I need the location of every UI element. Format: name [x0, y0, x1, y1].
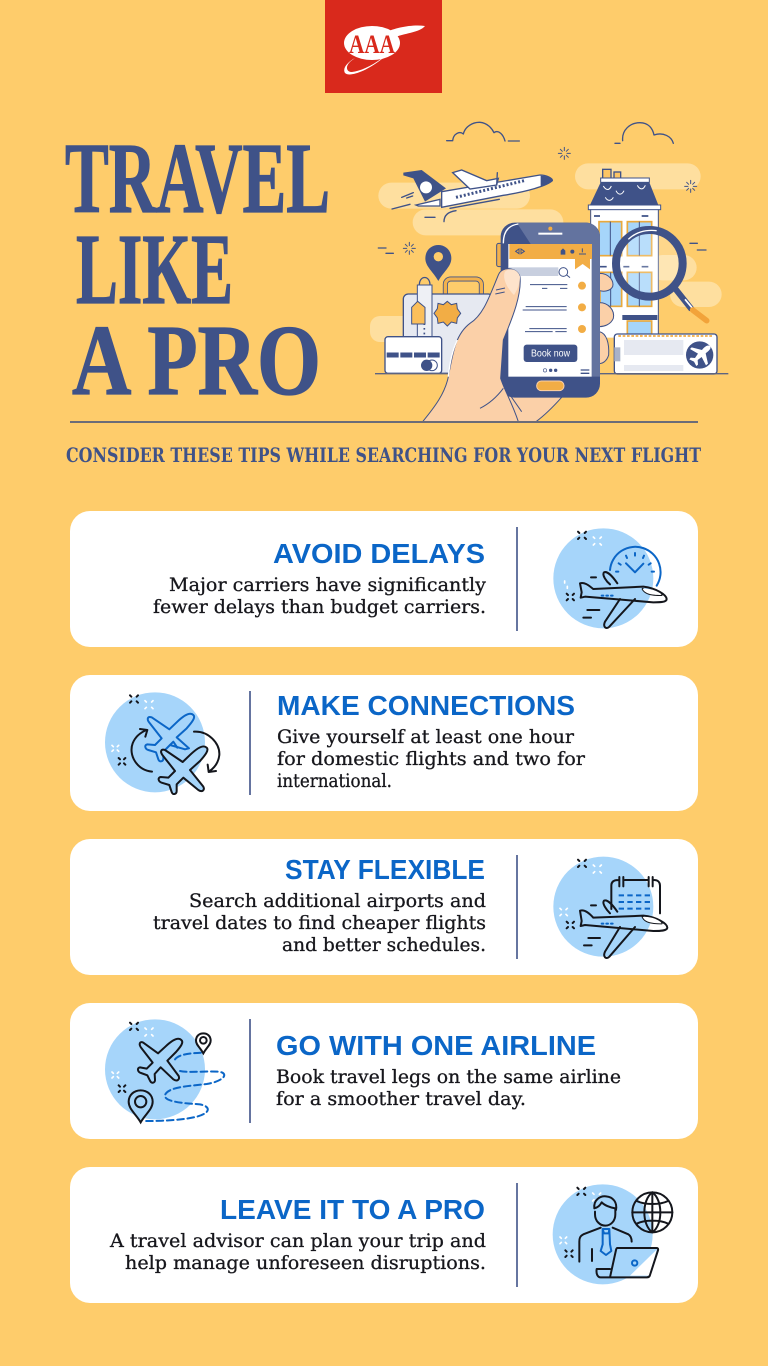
- text: stay flexible: travel dates to find cheaper flights: [153, 912, 486, 934]
- text: leave it to a pro: A travel advisor can plan your trip and: [109, 1230, 486, 1252]
- hotel building: [588, 169, 661, 338]
- airplane: [392, 170, 552, 222]
- icon: plane and calendar: [553, 857, 667, 958]
- AAA logo: AAA: [349, 30, 395, 59]
- text: avoid delays: Major carriers have significantly: [169, 574, 486, 596]
- text: avoid delays: fewer delays than budget carriers.: [153, 596, 486, 618]
- text: make connections: for domestic flights and two for: [277, 748, 586, 770]
- magnifying glass: [616, 230, 707, 321]
- title: A PRO: [72, 304, 321, 416]
- hand behind phone: [503, 273, 614, 422]
- text: make connections: [277, 726, 586, 792]
- hero illustration: phone booking scene: [370, 122, 728, 422]
- location pin: [425, 245, 451, 281]
- icon: two planes with arrows: [105, 692, 219, 794]
- heading: leave it to a pro: LEAVE IT TO A PRO: [220, 1194, 485, 1225]
- smartphone: [497, 223, 600, 398]
- icon: plane and clock: [553, 528, 667, 628]
- header divider line: [70, 421, 698, 423]
- text: make connections: international.: [277, 770, 392, 792]
- pale clouds: [370, 163, 722, 342]
- text: go with one airline: for a smoother travel day.: [276, 1088, 526, 1110]
- text: leave it to a pro: help manage unforeseen disruptions.: [125, 1252, 486, 1274]
- panel: leave it to a pro: [70, 1167, 698, 1303]
- AAA logo: [325, 0, 442, 93]
- text: stay flexible: and better schedules.: [282, 934, 486, 956]
- text: make connections: Give yourself at least one hour: [277, 726, 575, 748]
- title: [65, 122, 330, 416]
- text: go with one airline: [276, 1066, 621, 1110]
- text: go with one airline: Book travel legs on the same airline: [276, 1066, 621, 1088]
- panel: go with one airline: [70, 1003, 698, 1139]
- boarding pass: [614, 334, 717, 374]
- ground line: [375, 372, 728, 376]
- title: TRAVEL: [65, 122, 330, 234]
- credit card: [385, 337, 442, 373]
- icon: travel advisor with globe and laptop: [553, 1184, 672, 1284]
- panel: stay flexible: [70, 839, 698, 975]
- cloud outlines and sparkles: [378, 122, 706, 254]
- heading: avoid delays: AVOID DELAYS: [273, 538, 485, 569]
- text: stay flexible: Search additional airports and: [189, 890, 486, 912]
- text: leave it to a pro: [109, 1230, 486, 1274]
- suitcase: [403, 277, 493, 373]
- smartphone: Book now: [531, 348, 571, 359]
- heading: go with one airline: GO WITH ONE AIRLINE: [276, 1030, 596, 1061]
- panel: avoid delays: [70, 511, 698, 647]
- heading: make connections: MAKE CONNECTIONS: [277, 690, 575, 721]
- text: avoid delays: [153, 574, 486, 618]
- title: LIKE: [76, 213, 233, 325]
- text: stay flexible: [153, 890, 486, 956]
- icon: plane route with pins: [105, 1019, 224, 1122]
- heading: stay flexible: STAY FLEXIBLE: [285, 854, 485, 885]
- panel: make connections: [70, 675, 698, 811]
- hand in front of phone: [423, 269, 522, 422]
